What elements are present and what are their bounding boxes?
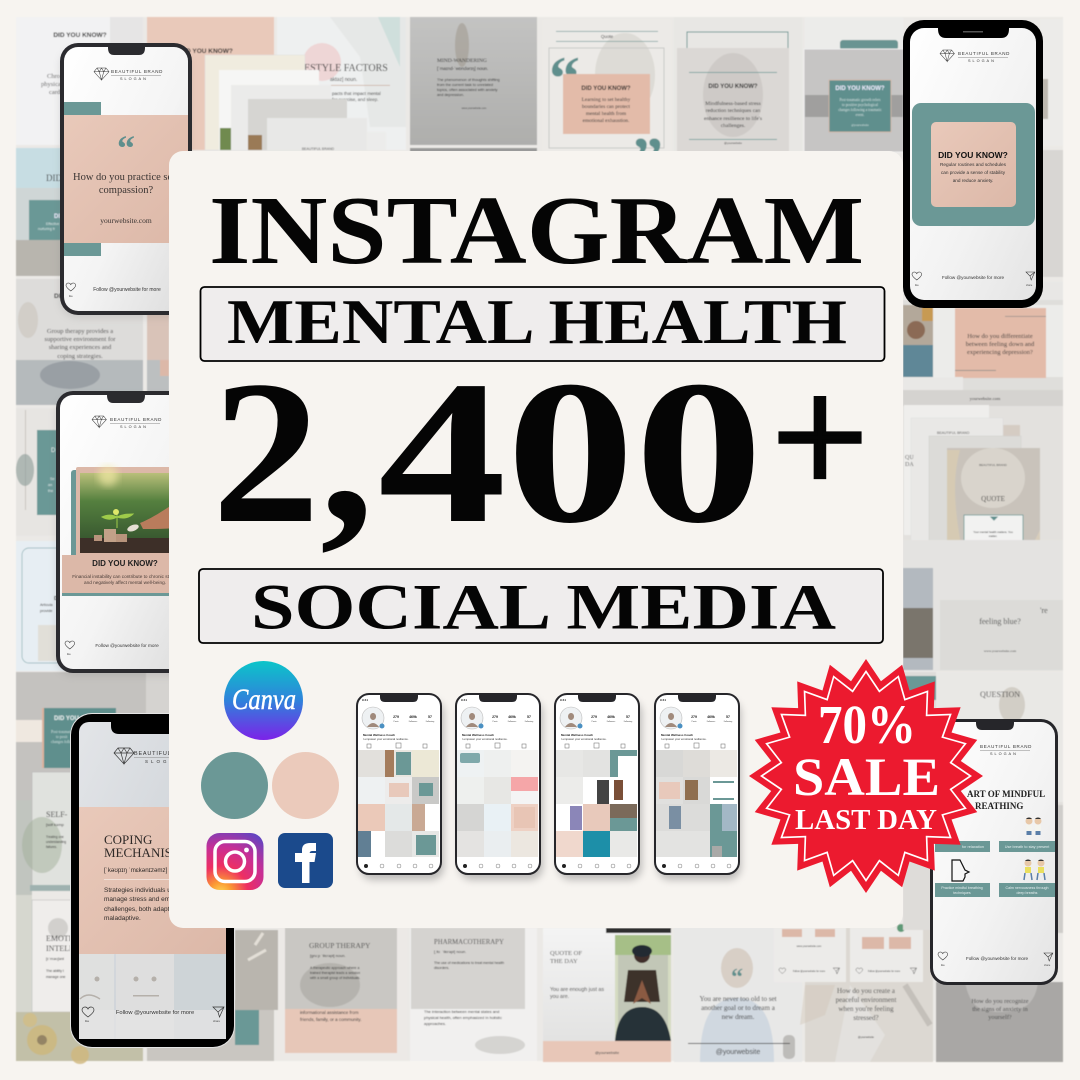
right strip top [1040, 19, 1063, 146]
phone footer: like [915, 284, 919, 287]
tile: paper stack behind first phone: BEAUTIFUL BRAND [302, 147, 335, 151]
phone footer: Follow @yourwebsite for more [942, 275, 1004, 280]
phone mockup 1: Following [426, 721, 434, 723]
smiley faces cards [79, 954, 226, 1039]
left column: teal card tile [16, 408, 170, 536]
left column: did-you-know blue photo tile: DI [54, 214, 60, 220]
brand logo: SLOGAN [120, 425, 148, 429]
heading box: mental health: MENTAL HEALTH [227, 287, 847, 357]
phone mockup 3: Posts [591, 720, 597, 723]
phone footer [65, 641, 159, 656]
tile: mind-wandering: MIND-WANDERING [437, 58, 487, 64]
bottom row: group therapy card: with a small group of individuals. [310, 976, 360, 980]
peach quote card: yourwebsite.com [100, 216, 152, 225]
sale badge: 70% [818, 694, 916, 755]
bottom row: pharmacotherapy card: PHARMACOTHERAPY [434, 939, 504, 946]
icon: canva: Canva [232, 683, 296, 716]
peach definition card: COPING [104, 832, 152, 847]
shadow behind second phone [56, 396, 191, 676]
right column: stacked quote cards: matter. [989, 534, 997, 538]
phone footer: like [69, 295, 73, 298]
teal card with peach tip: DID YOU KNOW? [938, 150, 1008, 160]
peach definition card: maladaptive. [104, 915, 141, 922]
big number: 2,400+: + [772, 343, 868, 531]
bottom row: recognize anxiety tile [936, 982, 1063, 1062]
brand logo: SLOGAN [990, 752, 1018, 756]
peach definition card: MECHANISMS [104, 845, 191, 860]
bottom row: group therapy card: trained therapist leads a session [310, 971, 360, 975]
bottom row: group therapy card: A therapeutic approach where a [310, 966, 359, 970]
icon: instagram [206, 833, 264, 890]
heading box: social media: SOCIAL MEDIA [251, 572, 836, 644]
tile: lifestyle factors: aktəz] noun. [330, 77, 357, 83]
sale badge: LAST DAY [795, 805, 937, 836]
left column: group therapy tile: coping strategies. [57, 353, 103, 360]
phone mockup 3: 469k [607, 715, 615, 719]
peach quote card: compassion? [99, 185, 153, 196]
bottom row: peaceful environment tile: stressed? [853, 1014, 879, 1022]
tile: quote card: ” [632, 126, 663, 194]
left column: self-compassion card: failures. [46, 845, 57, 849]
phone mockup 4: I empower your emotional resilience. [661, 737, 707, 741]
phone footer [66, 283, 161, 298]
phone mockup 2: Following [525, 721, 533, 723]
big number: 2,400+: 400 [378, 339, 763, 566]
peach definition card [79, 807, 226, 964]
phone footer: share [213, 1019, 220, 1023]
right column: feeling blue tile: 're [1040, 606, 1048, 615]
tile: post-traumatic growth: @yourwebsite [851, 123, 869, 127]
bottom row: pharmacotherapy card: The use of medications to treat mental health [434, 961, 504, 965]
left column: emotional intelligence card: manage one [46, 975, 66, 979]
bottom row: never too old quote: “ [731, 965, 743, 991]
brand logo: BEAUTIFUL BRAND [110, 417, 162, 422]
left column: group therapy tile: DI [54, 293, 61, 300]
tile: lifestyle factors: for exercise, and sleep. [332, 97, 379, 102]
phone mockup 3: 57 [626, 715, 630, 719]
phone mockup 4: Posts [691, 720, 697, 723]
bottom row: never too old quote: @yourwebsite [716, 1049, 760, 1056]
breathing heading [967, 789, 1045, 811]
left column: teal card tile: the [48, 489, 53, 493]
tile: quote card: emotional exhaustion. [583, 118, 629, 124]
phone mockup 3: I empower your emotional resilience. [561, 737, 607, 741]
phone mockup 4: 57 [726, 715, 730, 719]
tile: peach did you know: D YOU KNOW? [186, 48, 233, 55]
tile: mind-wandering: and depression. [437, 93, 464, 97]
tile: did you know chronic [16, 17, 143, 145]
bottom row: quote of the day [543, 928, 671, 1062]
phone mockup 1: 469k [409, 715, 417, 719]
phone mockup 3 [555, 694, 642, 880]
left column: did-you-know blue photo tile: Effective [46, 222, 59, 226]
bottom row: peaceful environment tile: Follow @yourwebsite for more [793, 970, 826, 973]
tile: did you know chronic: Chro [47, 73, 60, 80]
bottom row: never too old quote: new dream. [722, 1013, 755, 1021]
phone footer: Follow @yourwebsite for more [966, 956, 1028, 961]
teal card with peach tip: can provide a sense of stability [941, 170, 1006, 175]
phone footer: like [85, 1019, 90, 1023]
phone mockup 1 [357, 694, 444, 880]
brand logo [92, 416, 162, 429]
phone: art of mindful breathing [930, 719, 1058, 985]
phone mockup 3: Mental Wellness Coach [561, 733, 593, 737]
icon: breathing kids yellow [1024, 860, 1045, 880]
tile: post-traumatic growth: changes following a traumatic [838, 108, 882, 112]
phone mockup 4: 9:41 [660, 698, 666, 702]
bottom row: quote of the day: QUOTE OF [550, 950, 582, 957]
left column: pale blue tile: D [54, 596, 58, 602]
right column: stacked quote cards: QUOTE [981, 495, 1005, 503]
left column: pale blue tile [16, 541, 172, 671]
phone footer: like [941, 964, 945, 967]
right column: question tile [903, 672, 1063, 933]
did you know band: DID YOU KNOW? [92, 559, 158, 568]
left column: pale blue tile: Articula [40, 603, 54, 607]
brand logo: BEAUTIFUL BRAND [134, 751, 197, 757]
phone: regular routines did you know [903, 20, 1043, 308]
right column: feeling blue tile [903, 540, 1063, 671]
peach definition card: [ˈkəʊpɪŋ ˈmɛkənɪzəmz] noun. [104, 867, 185, 874]
bottom row: pharmacotherapy card [410, 928, 537, 1061]
bottom row: pharmacotherapy card: [ˌfɑː ˈθɛrəpi] noun. [434, 949, 466, 954]
right column: question tile: QUESTION [980, 690, 1020, 699]
teal card with peach tip [912, 103, 1035, 226]
bottom row: pharmacotherapy card: The interaction between mental states and [424, 1009, 499, 1014]
tile: did you know chronic: DID YOU KNOW? [53, 32, 107, 39]
phone mockup 4: 279 [691, 715, 697, 719]
phone footer [938, 952, 1053, 967]
big number: 2,400+: 2, [212, 339, 374, 566]
left column: group therapy tile: sharing experiences and [49, 344, 112, 351]
left column: self-compassion card: Treating one [46, 835, 64, 839]
phone mockup 4: Mental Wellness Coach [661, 733, 693, 737]
tile: mind-wandering [410, 17, 537, 152]
phone mockup 2: 57 [527, 715, 531, 719]
tile: mind-wandering: [ˈmaɪnd-ˈwɒndərɪŋ] noun. [437, 66, 488, 71]
left column: sunflowers [16, 1012, 143, 1064]
phone: coping mechanisms definition [70, 713, 235, 1048]
left column: post-traumatic growth teal card: DID YOU [54, 716, 79, 722]
right column: stacked quote cards: Your mental health matters. You [973, 530, 1013, 534]
peach quote card [64, 102, 188, 256]
left column: emotional intelligence card [16, 895, 77, 1015]
left column: emotional intelligence card: [ɪˈməʊʃənl [46, 956, 64, 961]
phone mockup 3: Followers [607, 721, 615, 723]
bottom row: recognize anxiety tile: How do you recognize [971, 998, 1029, 1005]
phone footer: Follow @yourwebsite for more [93, 287, 161, 293]
phone mockup 3: 9:41 [560, 698, 566, 702]
tile: mindfulness did you know: challenges. [721, 123, 746, 129]
tile: lifestyle factors: pacts that impact mental [332, 91, 381, 96]
left column: self-compassion card [16, 772, 77, 910]
tile: post-traumatic growth: to positive psychological [842, 103, 878, 107]
phone footer: Follow @yourwebsite for more [95, 643, 159, 648]
bottom row: quote of the day: @yourwebsite [595, 1051, 619, 1055]
phone mockup 2: 469k [508, 715, 516, 719]
tile: did you know chronic: cardi [49, 89, 62, 96]
tile: quote card: DID YOU KNOW? [581, 86, 631, 92]
plant and coins photo card [71, 466, 192, 560]
peach quote card: How do you practice self- [73, 172, 183, 183]
bottom row: never too old quote: another goal or to dream a [701, 1004, 776, 1012]
right column: stacked quote cards: QU [905, 455, 914, 461]
bottom row: peaceful environment tile: @yourwebsite [858, 1036, 875, 1039]
left column: did-you-know blue photo tile: nurturing fr [38, 227, 56, 231]
phone mockup 1: Mental Wellness Coach [363, 733, 395, 737]
right column: feeling blue tile: feeling blue? [979, 617, 1021, 626]
brand logo [980, 744, 1032, 756]
left column: group therapy tile: Group therapy provides a [47, 328, 113, 335]
left column: teal card tile: an [48, 483, 52, 487]
left column: emotional intelligence card: EMOTI [46, 934, 72, 943]
left column: emotional intelligence card: The ability t [46, 969, 64, 973]
shadow behind top-left phone [60, 48, 190, 318]
phone mockup 1: I empower your emotional resilience. [363, 737, 409, 741]
left column: did-you-know blue photo tile [16, 148, 143, 276]
breathing tips grid [935, 818, 1055, 897]
tile: mindfulness did you know: Mindfulness-based stress [705, 100, 761, 107]
phone mockup 1: Posts [393, 720, 399, 723]
bottom row: peaceful environment tile: Follow @yourwebsite for more [868, 970, 901, 973]
bottom row: quote of the day: THE DAY [550, 958, 578, 965]
bottom row: recognize anxiety tile: the signs of anxiety in [972, 1006, 1029, 1013]
tile: quote card: mental health from [586, 110, 627, 117]
breathing heading: ART OF MINDFUL [967, 789, 1045, 799]
left column: group therapy tile [16, 279, 169, 405]
icon: facebook [278, 833, 333, 888]
left column: post-traumatic growth teal card: Post-traumat [51, 730, 71, 734]
left column: self-compassion card: [sɛlf kəmp [46, 822, 65, 827]
instagram profile mockups [357, 694, 741, 880]
phone mockup 4: 469k [707, 715, 715, 719]
tile: post-traumatic growth: DID YOU KNOW? [835, 86, 885, 92]
sale badge: SALE [793, 747, 940, 807]
phone mockup 4: Following [724, 721, 732, 723]
left column: did-you-know blue photo tile: DID [46, 173, 62, 183]
tile: lifestyle factors [277, 17, 406, 150]
tile: peach did you know [147, 17, 274, 150]
phone mockup 1: 279 [393, 715, 399, 719]
icon: breathing kids blue [1026, 818, 1042, 835]
brand logo [114, 748, 197, 764]
heading box: social media [199, 569, 883, 644]
left column: post-traumatic growth teal card: to posit [56, 735, 68, 739]
tile: quote card: Quote [601, 34, 614, 39]
bottom row: group therapy card: friends, family, or a community. [300, 1017, 362, 1022]
right column: stacked quote cards: BEAUTIFUL BRAND [979, 463, 1008, 467]
phone footer: share [1026, 284, 1033, 287]
left column: emotional intelligence card: INTELI [46, 944, 72, 953]
phone footer [82, 1007, 224, 1023]
left column: pale blue tile: provide [40, 609, 52, 613]
phone mockup 2: 279 [492, 715, 498, 719]
notch [108, 44, 145, 55]
did you know band [62, 555, 192, 596]
bottom row: group therapy card: GROUP THERAPY [309, 941, 371, 950]
tile: quote card: boundaries can protect [582, 104, 630, 110]
bottom row: pharmacotherapy card: disorders. [434, 966, 449, 970]
phone: financial instability did you know [56, 391, 196, 673]
phone mockup 2: Followers [508, 721, 516, 723]
peach definition card: challenges, both adaptive and [104, 906, 191, 913]
right column: how do you differentiate tile: between feeling down and [966, 341, 1035, 348]
phone mockup 2 [456, 694, 543, 880]
brand logo: BEAUTIFUL BRAND [980, 744, 1032, 749]
phone mockup 1: 9:41 [362, 698, 368, 702]
right column: stacked quote cards: BEAUTIFUL BRAND [937, 431, 970, 435]
breathing tips grid: for relaxation [962, 845, 984, 849]
tile: mindfulness did you know: enhance resilience to life's [704, 115, 762, 122]
brand logo: SLOGAN [145, 759, 182, 764]
right column: stacked quote cards: @yourwebsite [986, 565, 1001, 568]
breathing tips grid: Practice mindful breathing [941, 886, 983, 890]
bottom row: pharmacotherapy card: physical health, often emphasized in holistic [424, 1015, 502, 1020]
tile: paper stack behind first phone [205, 55, 386, 151]
left column: post-traumatic growth teal card [16, 672, 170, 804]
sale badge [749, 659, 983, 893]
phone footer: like [67, 653, 71, 656]
right column: stacked quote cards: DA [905, 462, 914, 468]
teal card with peach tip: and reduce anxiety. [953, 178, 993, 183]
phone footer [912, 272, 1035, 287]
notch [976, 720, 1014, 730]
brand logo [940, 50, 1010, 63]
tile: mindfulness did you know [674, 17, 802, 152]
tile: mindfulness did you know: reduction techniques can [706, 108, 761, 114]
colour swatch: peach [272, 752, 339, 819]
bottom row: group therapy card: informational assistance from [300, 1010, 359, 1015]
phone: self-compassion question [60, 43, 192, 315]
bottom row: peaceful environment tile: How do you create a [837, 987, 896, 995]
phone footer: share [1044, 964, 1051, 967]
brand logo: BEAUTIFUL BRAND [111, 69, 163, 74]
tile: did you know chronic: physica [41, 81, 61, 88]
right column: how do you differentiate tile: How do you differentiate [967, 333, 1033, 340]
left column: self-compassion card: SELF- [46, 810, 68, 819]
phone mockup 2: I empower your emotional resilience. [462, 737, 508, 741]
breathing tips grid: deep breaths [1017, 891, 1038, 895]
phone mockup 2: Mental Wellness Coach [462, 733, 494, 737]
bottom row: quote of the day: You are enough just as [550, 987, 604, 993]
teal card with peach tip: Regular routines and schedules [940, 162, 1007, 167]
title: INSTAGRAM: INSTAGRAM [209, 177, 864, 284]
notch [938, 24, 1009, 38]
right column: stacked quote cards: Follow @yourwebsite for more [976, 597, 1011, 600]
tile: post-traumatic growth [804, 17, 904, 152]
tile: quote card: “ [549, 45, 580, 113]
notch [107, 392, 145, 403]
bottom row: pharmacotherapy card: approaches. [424, 1021, 446, 1026]
brand logo: SLOGAN [120, 77, 148, 81]
phone mockup 3: 279 [591, 715, 597, 719]
bottom row: peaceful environment tile: when you're feeling [838, 1005, 894, 1013]
tile: post-traumatic growth: event. [856, 113, 864, 117]
left column: teal card tile: Se [50, 477, 55, 481]
breathing tips grid: Calm nervousness through [1006, 886, 1048, 890]
phone mockup 4 [655, 694, 741, 880]
tile: mindfulness did you know: DID YOU KNOW? [708, 84, 758, 90]
left column: teal card tile: D [51, 448, 56, 454]
tile: mind-wandering: topics, often associated with anxiety [437, 88, 498, 92]
icon: canva [224, 661, 303, 740]
bottom row: group therapy card: [ɡruːp ˈθɛrəpi] noun. [310, 953, 346, 958]
brand logo: SLOGAN [968, 59, 996, 63]
phone mockup 1: Followers [409, 721, 417, 723]
bottom row: peaceful environment tile [774, 924, 933, 1062]
phone mockup 4: Followers [707, 721, 715, 723]
bottom row: quote of the day: you are. [550, 994, 569, 1000]
phone mockup 3: Following [624, 721, 632, 723]
peach quote card: “ [117, 128, 135, 168]
tile: mind-wandering: www.yourwebsite.com [462, 107, 486, 110]
bottom row: peaceful environment tile: peaceful environment [836, 996, 896, 1004]
icon: face breathing [952, 860, 969, 881]
tile: post-traumatic growth: Post-traumatic growth refers [839, 98, 881, 102]
central panel [169, 151, 903, 928]
breathing tips grid: Use breath to stay present [1005, 845, 1050, 849]
phone mockup 1: 57 [428, 715, 432, 719]
tile: quote card: Learning to set healthy [582, 97, 631, 103]
notch [111, 720, 191, 734]
bottom row: recognize anxiety tile: yourself? [988, 1014, 1012, 1021]
left column: group therapy tile: supportive environment for [44, 336, 116, 343]
phone mockup 2: 9:41 [461, 698, 467, 702]
bottom row: group therapy card [278, 928, 406, 1061]
brand logo: BEAUTIFUL BRAND [958, 51, 1010, 56]
tile: mind-wandering: from the current task to unrelated [437, 83, 493, 87]
right column: how do you differentiate tile: experiencing depression? [967, 349, 1033, 356]
big number: 2,400+ [212, 339, 868, 566]
did you know band: and negatively affect mental well-being. [84, 580, 166, 585]
breathing heading: REATHING [975, 801, 1023, 811]
right column: feeling blue tile: www.yourwebsite.com [984, 649, 1016, 653]
tile: mindfulness did you know: @yourwebsite [724, 141, 742, 145]
tile: quote card [543, 20, 671, 194]
left column: self-compassion card: understanding [46, 840, 66, 844]
phone mockup 2: Posts [492, 720, 498, 723]
tile: lifestyle factors: ESTYLE FACTORS [304, 63, 388, 74]
peach definition card: manage stress and emotional [104, 896, 190, 903]
phone footer: Follow @yourwebsite for more [116, 1010, 194, 1016]
bottom row: peaceful environment tile: www.yourwebsite.com [797, 945, 821, 948]
did you know band: Financial instability can contribute to chronic stress [72, 574, 178, 579]
bottom row: never too old quote [674, 928, 802, 1062]
breathing tips grid: techniques [953, 891, 971, 895]
left column: post-traumatic growth teal card: changes follo [51, 740, 71, 744]
tile: mind-wandering: The phenomenon of thoughts shifting [437, 78, 500, 82]
bottom row: never too old quote: You are never too old to set [699, 995, 777, 1003]
right column: stacked quote cards [903, 405, 1063, 612]
peach definition card: Strategies individuals use to [104, 887, 185, 894]
brand logo [94, 68, 163, 81]
bottom row: photo tile [147, 930, 278, 1061]
right column: how do you differentiate tile [903, 300, 1063, 408]
right column: how do you differentiate tile: yourwebsite.com [970, 396, 1001, 401]
colour swatch: teal [201, 752, 268, 819]
